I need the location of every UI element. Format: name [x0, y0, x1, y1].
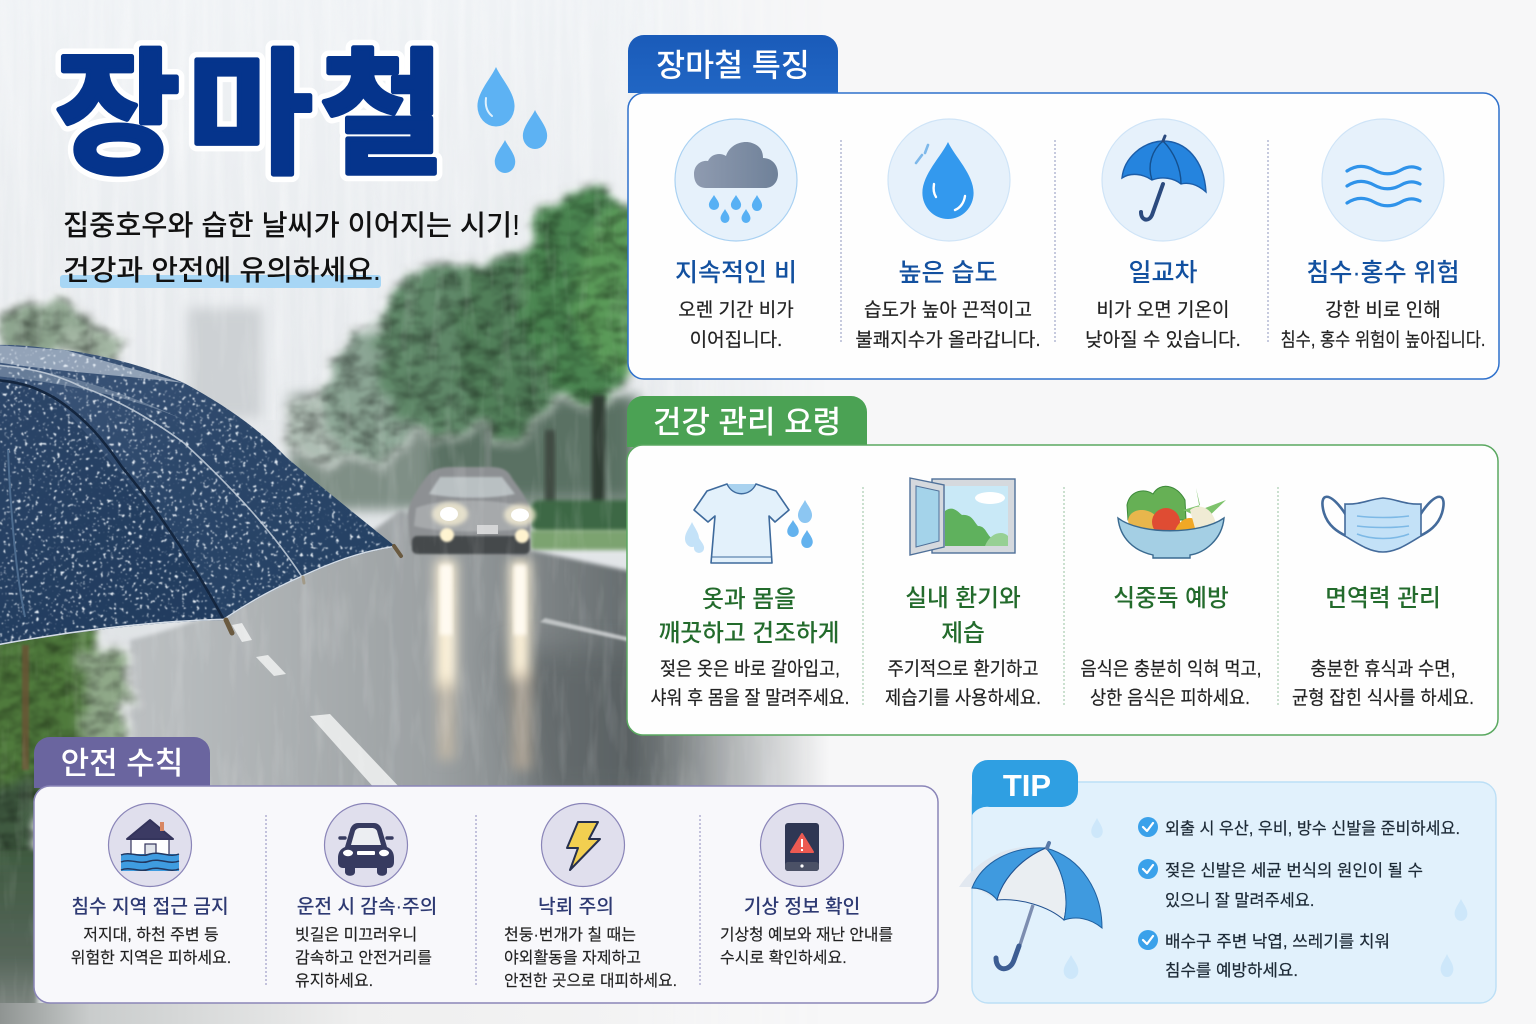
tip 3: 배수구 주변 낙엽, 쓰레기를 치워: [1165, 933, 1390, 951]
icon: tip umbrella: [959, 843, 1102, 969]
item: 낙뢰 주의: [504, 804, 677, 990]
headlight reflections: [436, 560, 532, 770]
item: 실내 환기: 제습: [941, 620, 985, 647]
item: 높은 습도: [855, 119, 1041, 351]
heading tab: 장마철 특징: [628, 35, 838, 105]
item: 운전 시 감속·주의: [295, 804, 437, 990]
car: [408, 467, 536, 556]
icon: title rain drops: [477, 67, 547, 173]
item: 높은 습도: 높은 습도: [899, 259, 997, 287]
icon: rain cloud: [694, 142, 778, 223]
tip 2: 있으니 잘 말려주세요.: [1165, 892, 1314, 910]
item: 침수 지역 접근 금지: 저지대, 하천 주변 등: [83, 926, 219, 944]
lane markings: [232, 623, 402, 790]
item: 침수 지역 접근 금지: 침수 지역 접근 금지: [71, 896, 229, 918]
item: 지속적인 비: 이어집니다.: [690, 329, 782, 351]
item: 식중독 예방: 상한 음식은 피하세요.: [1090, 687, 1250, 709]
roadside greenery: [0, 630, 141, 854]
item: 지속적인 비: 오렌 기간 비가: [678, 299, 794, 321]
tip 2: 젖은 신발은 세균 번식의 원인이 될 수: [1165, 862, 1423, 880]
subtitle: [60, 210, 520, 288]
icon: water waves: [1347, 166, 1420, 206]
tree band behind car: [290, 395, 640, 510]
item: 실내 환기: 주기적으로 환기하고: [888, 658, 1038, 680]
panel: TIP: [959, 760, 1496, 1003]
heading tab: TIP: [972, 760, 1078, 815]
item: 면역력 관리: 충분한 휴식과 수면,: [1310, 658, 1456, 680]
heading tab: 건강 관리 요령: [627, 396, 867, 460]
item: 기상 정보 확인: 기상 정보 확인: [744, 896, 860, 918]
item: 식중독 예방: [1080, 486, 1262, 709]
item: 식중독 예방: 음식은 충분히 익혀 먹고,: [1080, 658, 1262, 680]
item: 침수·홍수 위험: 침수·홍수 위험: [1306, 259, 1460, 287]
item: 일교차: 낮아질 수 있습니다.: [1085, 329, 1241, 351]
item: 실내 환기: [885, 478, 1041, 709]
item: 실내 환기: 제습기를 사용하세요.: [885, 687, 1041, 709]
panel: 안전 수칙: [34, 737, 938, 1003]
tip 3: [1138, 930, 1390, 980]
item: 운전 시 감속·주의: 감속하고 안전거리를: [295, 949, 432, 967]
tip 3: 침수를 예방하세요.: [1165, 962, 1298, 980]
item: 옷과 몸: 깨끗하고 건조하게: [659, 620, 839, 647]
heading tab: TIP: TIP: [1003, 768, 1051, 803]
item: 일교차: 일교차: [1128, 259, 1198, 287]
tip 1: 외출 시 우산, 우비, 방수 신발을 준비하세요.: [1165, 820, 1460, 838]
item: 옷과 몸: [650, 484, 850, 709]
title: 장마철: [55, 39, 445, 191]
item: 면역력 관리: 면역력 관리: [1325, 585, 1441, 612]
icon: salad bowl: [1118, 486, 1226, 558]
item: 식중독 예방: 식중독 예방: [1113, 585, 1229, 612]
icon: phone with warning: [785, 823, 819, 871]
photo: rainy street scene: [0, 0, 900, 1024]
icon: open window: [910, 478, 1015, 555]
item: 침수·홍수 위험: [1280, 119, 1486, 351]
item: 일교차: 비가 오면 기온이: [1097, 299, 1229, 321]
item: 옷과 몸: 샤워 후 몸을 잘 말려주세요.: [650, 687, 850, 709]
item: 운전 시 감속·주의: 빗길은 미끄러우니: [295, 926, 417, 944]
tip 2: [1138, 859, 1423, 910]
item: 면역력 관리: 균형 잡힌 식사를 하세요.: [1292, 687, 1474, 709]
item: 지속적인 비: 지속적인 비: [675, 259, 797, 287]
item: 낙뢰 주의: 안전한 곳으로 대피하세요.: [504, 972, 677, 990]
item: 침수·홍수 위험: 침수, 홍수 위험이 높아집니다.: [1280, 329, 1486, 351]
panel: 건강 관리 요령: [627, 396, 1498, 735]
item: 낙뢰 주의: 천둥·번개가 칠 때는: [504, 926, 636, 944]
item: 지속적인 비: [675, 119, 797, 351]
item: 실내 환기: 실내 환기와: [905, 585, 1021, 612]
item: 침수·홍수 위험: 강한 비로 인해: [1325, 299, 1441, 321]
title: 장마철: [55, 39, 445, 191]
item: 침수 지역 접근 금지: 위험한 지역은 피하세요.: [71, 949, 231, 967]
icon: face mask: [1322, 497, 1444, 552]
item: 일교차: [1085, 119, 1241, 351]
icon: water drop: [916, 142, 974, 219]
large wet umbrella: [0, 340, 401, 650]
road: [128, 510, 814, 786]
icon: t-shirt with drops: [685, 484, 813, 563]
item: 기상 정보 확인: [720, 804, 893, 967]
item: 면역력 관리: [1292, 497, 1474, 709]
subtitle: 집중호우와 습한 날씨가 이어지는 시기!: [63, 210, 520, 242]
icon: car: [338, 823, 394, 876]
heading tab: 안전 수칙: [34, 737, 210, 800]
item: 낙뢰 주의: 야외활동을 자제하고: [504, 949, 641, 967]
item: 높은 습도: 불쾌지수가 올라갑니다.: [855, 329, 1041, 351]
icon: umbrella: [1122, 136, 1206, 220]
subtitle: 건강과 안전에 유의하세요.: [63, 255, 381, 287]
item: 낙뢰 주의: 낙뢰 주의: [538, 896, 614, 918]
item: 기상 정보 확인: 수시로 확인하세요.: [720, 949, 847, 967]
item: 높은 습도: 습도가 높아 끈적이고: [864, 299, 1032, 321]
icon: lightning bolt: [567, 822, 600, 870]
icon: flooded house: [121, 820, 179, 871]
heading tab: 건강 관리 요령: 건강 관리 요령: [653, 405, 841, 440]
item: 운전 시 감속·주의: 유지하세요.: [295, 972, 373, 990]
heading tab: 안전 수칙: 안전 수칙: [61, 746, 183, 781]
item: 운전 시 감속·주의: 운전 시 감속·주의: [297, 896, 437, 918]
item: 옷과 몸: 옷과 몸을: [702, 586, 796, 613]
panel: 장마철 특징: [628, 35, 1499, 379]
heading tab: 장마철 특징: 장마철 특징: [656, 47, 810, 83]
item: 침수 지역 접근 금지: [71, 804, 231, 967]
item: 기상 정보 확인: 기상청 예보와 재난 안내를: [720, 926, 893, 944]
far and near trees: [0, 183, 675, 465]
item: 옷과 몸: 젖은 옷은 바로 갈아입고,: [660, 658, 840, 680]
decorative drops: [1064, 818, 1467, 979]
